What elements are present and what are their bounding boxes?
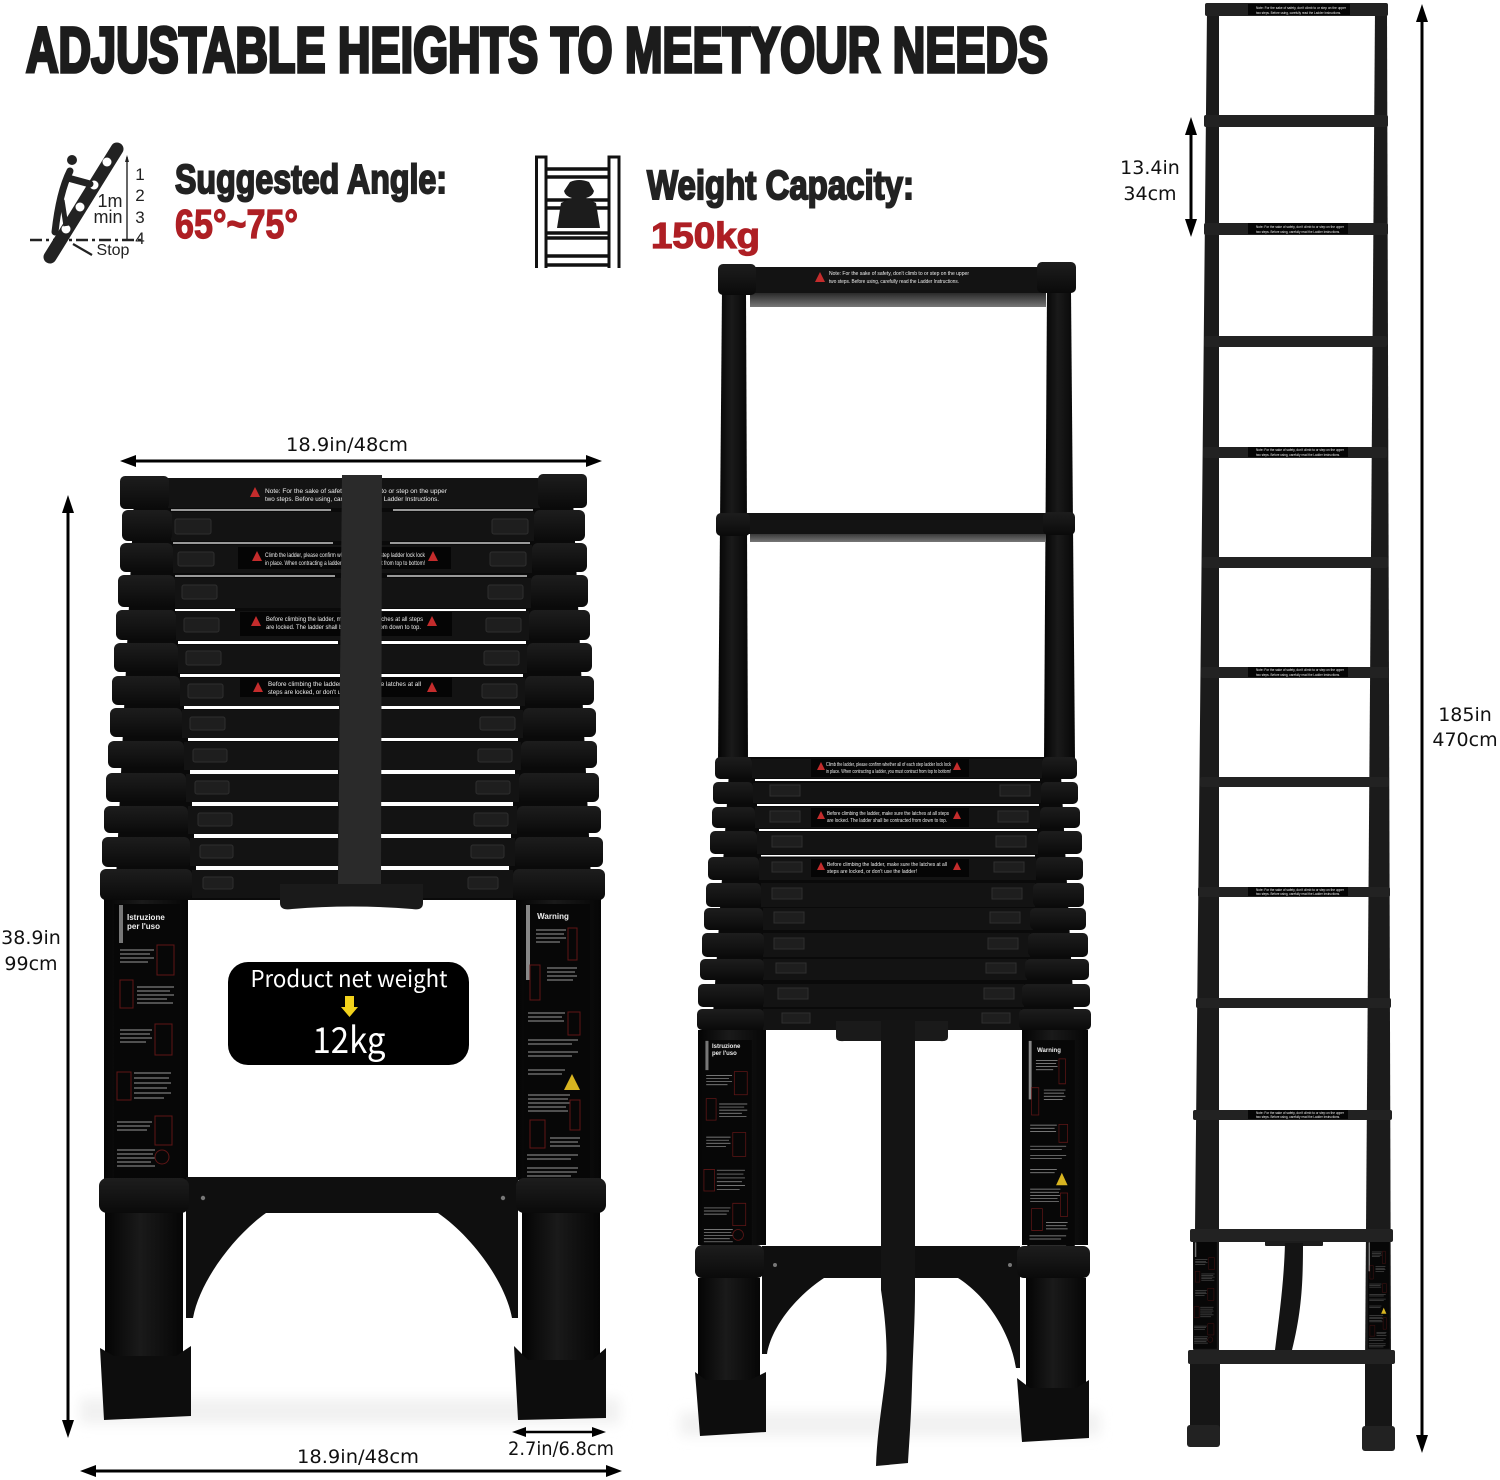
- dimension: collapsed height: [1, 495, 74, 1438]
- icon: climbing angle: 4: [135, 229, 145, 248]
- upper steps: [716, 262, 1076, 542]
- suggested angle text: 65°~75°: [175, 201, 298, 247]
- weight capacity text: 150kg: [651, 215, 760, 256]
- callout: product net weight: [228, 960, 469, 1065]
- rung warning stickers: [238, 487, 452, 697]
- rung warning stickers: Note: For the sake of safety, don't climb to or step on the upper: [265, 488, 448, 495]
- rung stickers: two steps. Before using, carefully read the Ladder Instructions.: [1256, 1115, 1340, 1119]
- rung stickers: two steps. Before using, carefully read the Ladder Instructions.: [1256, 230, 1340, 234]
- icon: climbing angle: [30, 149, 145, 259]
- rung latches: [175, 519, 528, 889]
- rungs: [1188, 3, 1395, 1364]
- rung stickers: two steps. Before using, carefully read the Ladder Instructions.: [1256, 673, 1340, 677]
- rung warning stickers: are locked. The ladder shall be contracted from down to top.: [827, 818, 947, 824]
- rung warning stickers: are locked. The ladder shall be contracted from down to top.: [266, 625, 421, 631]
- suggested angle text: [175, 156, 447, 247]
- rung warning stickers: Climb the ladder, please confirm whether all of each step ladder lock lock: [265, 553, 426, 559]
- rubber feet: [695, 1372, 1089, 1442]
- slits between rungs: [171, 509, 533, 870]
- warning sticker right: Warning: [1037, 1048, 1061, 1054]
- instruction stickers: [1193, 1242, 1390, 1349]
- dimension: top width: [120, 434, 602, 467]
- rubber feet: [100, 1346, 606, 1420]
- weight capacity text: [647, 162, 914, 256]
- rung warning stickers: two steps. Before using, carefully read the Ladder Instructions.: [265, 496, 439, 503]
- ladder: fully extended: [1187, 3, 1395, 1451]
- handle: [836, 1021, 948, 1041]
- rung warning stickers: Before climbing the ladder, make sure the latches at all: [268, 682, 421, 688]
- rung stickers: Note: For the sake of safety, don't climb to or step on the upper: [1256, 1111, 1345, 1115]
- warning sticker right: Warning: [537, 912, 569, 921]
- suggested angle text: Suggested Angle:: [175, 156, 447, 202]
- rung warning stickers: Climb the ladder, please confirm whether all of each step ladder lock lock: [826, 762, 951, 768]
- dimension: top width: 18.9in/48cm: [286, 434, 408, 456]
- warning sticker right: [1027, 1040, 1075, 1256]
- warning sticker right: [524, 904, 590, 1181]
- icon: weight on ladder: [536, 157, 619, 268]
- dimension: foot width: 2.7in/6.8cm: [508, 1438, 614, 1460]
- dimension: rung spacing: 13.4in: [1120, 157, 1180, 179]
- dimension: bottom width: [80, 1446, 622, 1477]
- upper tubes: [718, 290, 1075, 760]
- ladder: partly extended: [695, 262, 1091, 1466]
- dimension: collapsed height: 38.9in: [1, 927, 61, 949]
- rung warning stickers: [811, 759, 969, 877]
- dimension: full height: 185in: [1438, 704, 1492, 726]
- rung stickers: [1248, 4, 1350, 1119]
- rung warning stickers: Before climbing the ladder, make sure the latches at all steps: [827, 811, 949, 817]
- dimension: full height: [1416, 4, 1498, 1453]
- base bar and arch: [762, 1246, 1020, 1368]
- folded section: [697, 757, 1091, 1390]
- icon: climbing angle: 2: [135, 186, 145, 205]
- handle: [1265, 1241, 1323, 1246]
- dimension: rung spacing: [1120, 117, 1197, 237]
- instruction sticker left: Istruzione: [127, 913, 165, 922]
- icon: climbing angle: 1m: [97, 191, 123, 211]
- rung warning stickers: Before climbing the ladder, make sure the latches at all: [827, 862, 947, 868]
- rung stickers: two steps. Before using, carefully read the Ladder Instructions.: [1256, 453, 1340, 457]
- instruction sticker left: per l'uso: [712, 1051, 737, 1057]
- callout: product net weight: Product net weight: [250, 960, 448, 994]
- rung warning stickers: steps are locked, or don't use the ladder!: [827, 869, 917, 875]
- lower tubes: [104, 898, 601, 1365]
- rung warning stickers: in place. When contracting a ladder, you must contract from top to bottom!: [826, 769, 951, 775]
- upper steps: Note: For the sake of safety, don't climb to or step on the upper: [829, 271, 969, 277]
- hanging strap: [1275, 1243, 1303, 1350]
- dimension: bottom width: 18.9in/48cm: [297, 1446, 419, 1468]
- rung stickers: Note: For the sake of safety, don't climb to or step on the upper: [1256, 225, 1345, 229]
- rung warning stickers: in place. When contracting a ladder, you must contract from top to bottom!: [265, 561, 425, 567]
- dimension: foot width: [508, 1427, 614, 1460]
- instruction sticker left: [114, 904, 180, 1181]
- callout: product net weight: 12kg: [312, 1012, 386, 1064]
- weight capacity text: Weight Capacity:: [647, 162, 914, 208]
- instruction sticker left: [702, 1040, 752, 1253]
- icon: climbing angle: 1: [135, 165, 145, 184]
- instruction sticker left: per l'uso: [127, 922, 160, 931]
- carrying handle: [280, 884, 423, 909]
- icon: climbing angle: Stop: [97, 242, 130, 259]
- upper steps: two steps. Before using, carefully read the Ladder Instructions.: [829, 279, 959, 285]
- rung warning stickers: Before climbing the ladder, make sure the latches at all steps: [266, 617, 423, 623]
- icon: climbing angle: min: [93, 207, 123, 227]
- rung stickers: two steps. Before using, carefully read the Ladder Instructions.: [1256, 11, 1341, 15]
- rung stickers: Note: For the sake of safety, don't climb to or step on the upper: [1256, 888, 1345, 892]
- hanging strap: [876, 1020, 915, 1466]
- rungs: [100, 474, 605, 900]
- dimension: rung spacing: 34cm: [1123, 183, 1177, 205]
- rung stickers: Note: For the sake of safety, don't climb to or step on the upper: [1256, 6, 1347, 10]
- ladder: collapsed front view: [99, 474, 606, 1420]
- rung stickers: Note: For the sake of safety, don't climb to or step on the upper: [1256, 668, 1345, 672]
- icon: climbing angle: 3: [135, 208, 145, 227]
- title: ADJUSTABLE HEIGHTS TO MEETYOUR NEEDS: [26, 14, 1048, 86]
- floor shadow: [80, 1398, 1100, 1436]
- rung stickers: Note: For the sake of safety, don't climb to or step on the upper: [1256, 448, 1345, 452]
- dimension: full height: 470cm: [1432, 729, 1498, 751]
- velcro strap: [338, 475, 382, 884]
- rung warning stickers: steps are locked, or don't use the ladder!: [268, 690, 378, 696]
- dimension: collapsed height: 99cm: [4, 953, 58, 975]
- rung stickers: two steps. Before using, carefully read the Ladder Instructions.: [1256, 892, 1340, 896]
- base bar and arch: [186, 1177, 518, 1318]
- instruction sticker left: Istruzione: [712, 1044, 741, 1050]
- rails: [1187, 10, 1395, 1451]
